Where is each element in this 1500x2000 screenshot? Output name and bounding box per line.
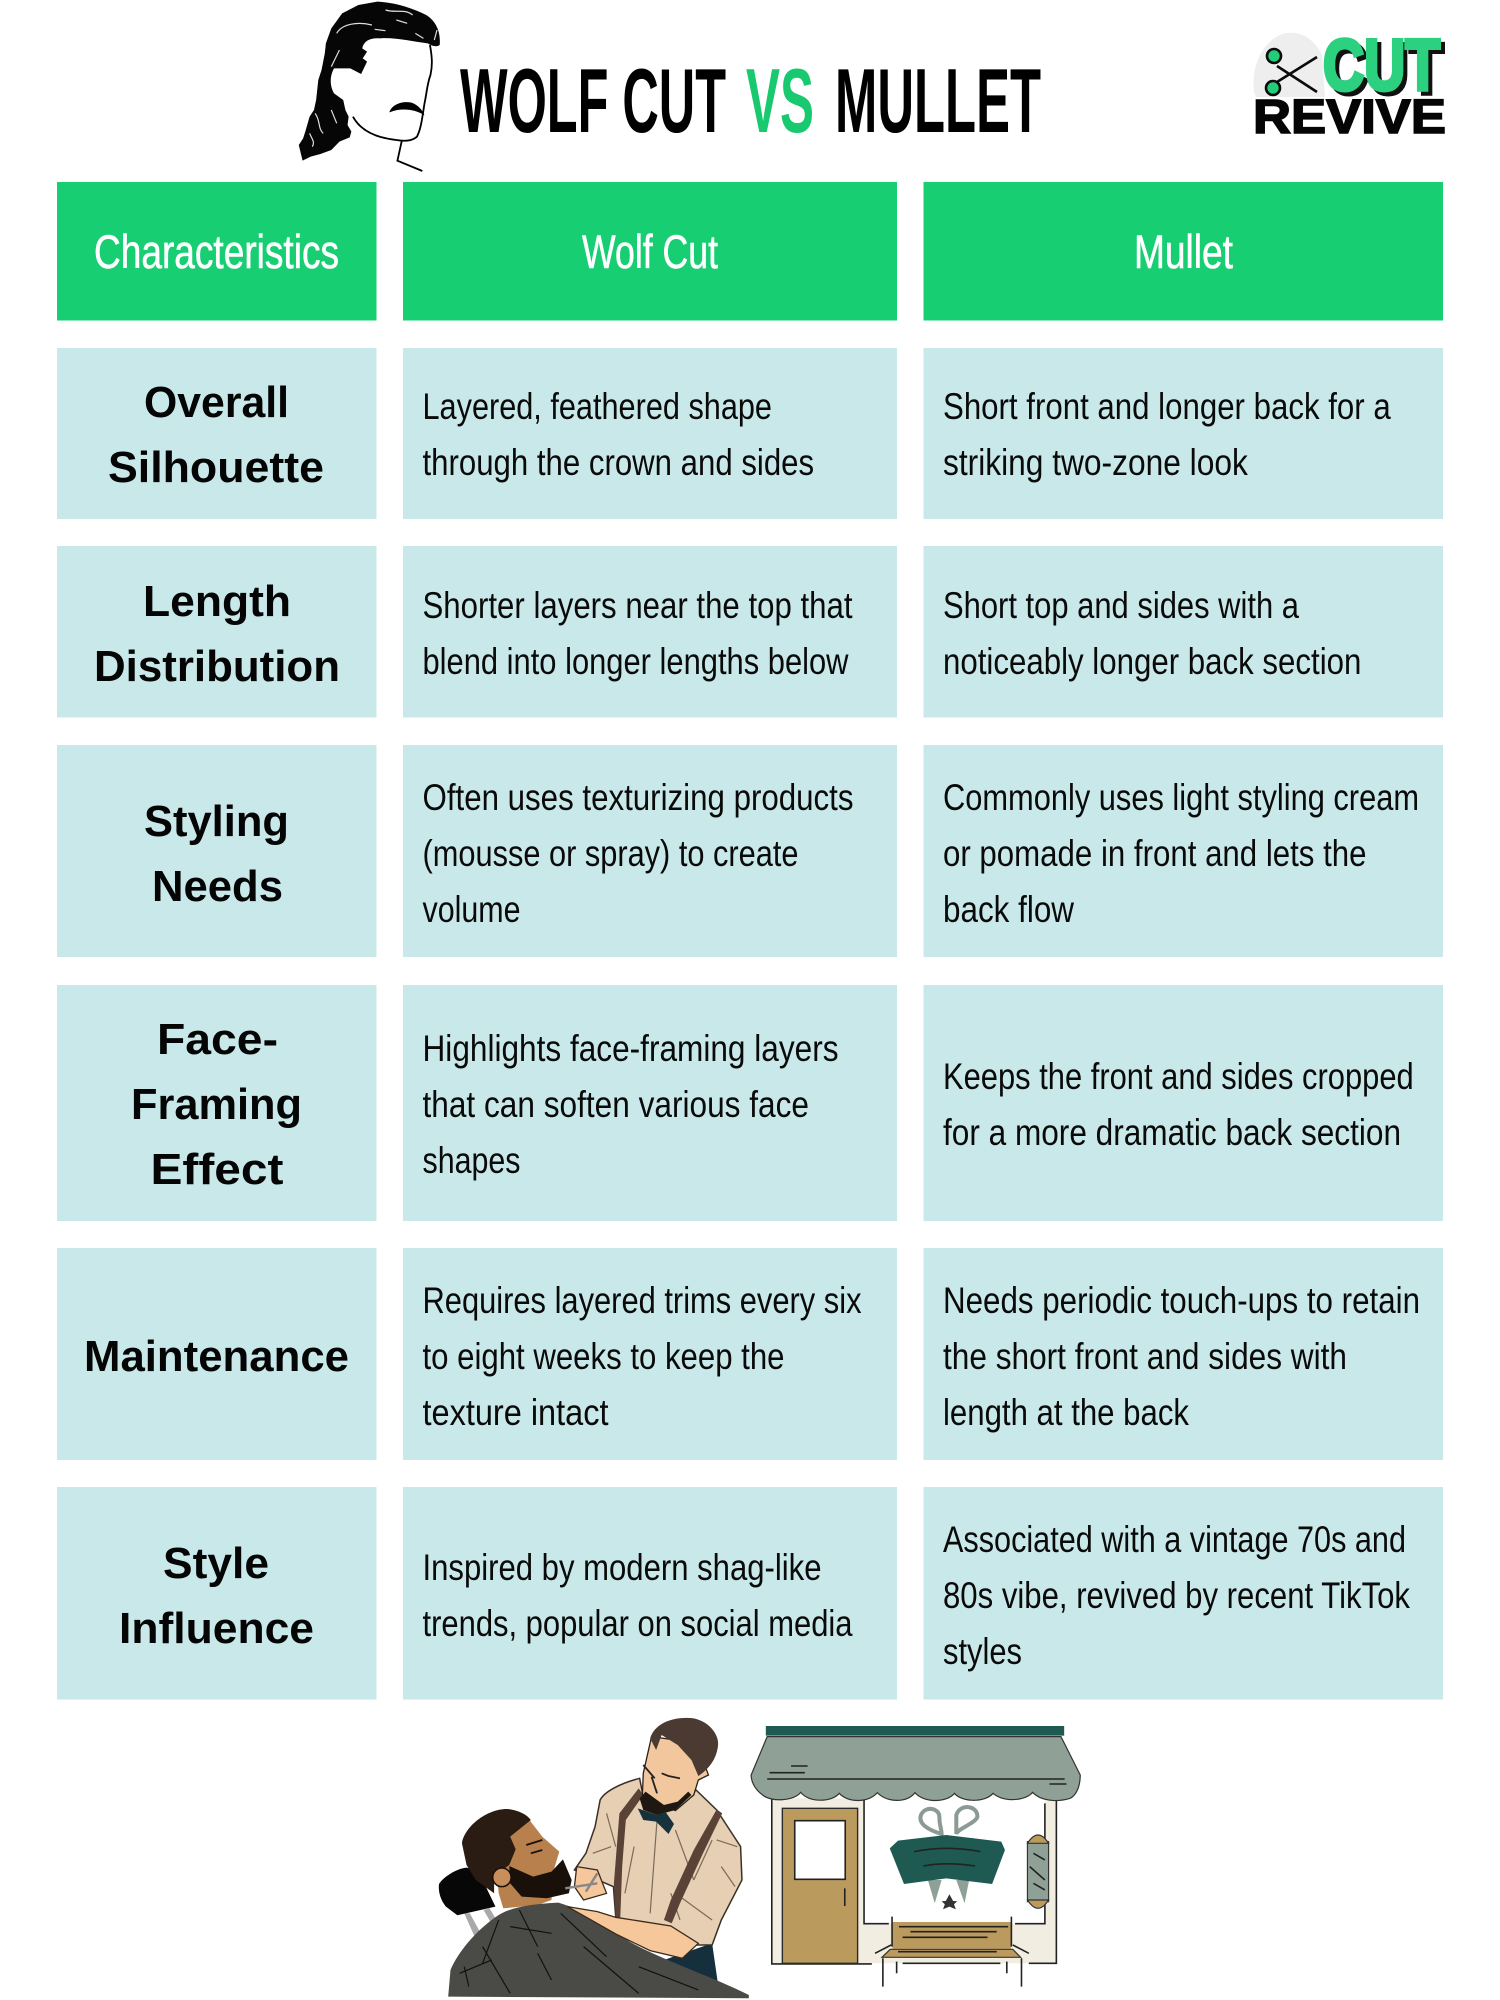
wolf cut: maintenance: Requires layered trims every six <box>422 1280 862 1321</box>
mullet: silhouette: striking two-zone look <box>943 442 1248 483</box>
row label: Maintenance <box>57 1248 376 1460</box>
mullet: maintenance: Needs periodic touch-ups to retain <box>943 1280 1420 1321</box>
icon: scissors <box>1266 49 1317 95</box>
logo: Cut Revive <box>1253 26 1446 144</box>
client head <box>462 1809 572 1908</box>
header: Characteristics <box>57 182 376 320</box>
mullet: face framing <box>924 985 1443 1221</box>
mullet: styling: back flow <box>943 889 1074 930</box>
wolf cut: style influence: Inspired by modern shag-like <box>422 1547 822 1588</box>
barber pole <box>1027 1835 1049 1908</box>
row label: Overall Silhouette <box>57 348 376 519</box>
mullet: length <box>924 546 1443 718</box>
wolf cut: face framing: shapes <box>422 1140 520 1181</box>
mullet: style influence: styles <box>943 1631 1022 1672</box>
barber trousers <box>664 1943 718 1982</box>
mullet: styling: or pomade in front and lets the <box>943 833 1366 874</box>
wolf cut: styling <box>403 745 897 957</box>
row label: Style Influence <box>57 1487 376 1700</box>
barber shirt <box>574 1778 742 1945</box>
wolf cut: style influence <box>403 1487 897 1700</box>
illustration: barber shop <box>751 1726 1080 1987</box>
row label: Face-Framing Effect: Effect <box>150 1145 284 1194</box>
wolf cut: face framing <box>403 985 897 1221</box>
awning <box>751 1726 1080 1801</box>
mullet: maintenance: length at the back <box>943 1392 1189 1433</box>
icon: moustache <box>389 102 425 115</box>
wolf cut: maintenance <box>403 1248 897 1460</box>
header: Wolf Cut <box>403 182 897 320</box>
suspenders <box>614 1788 722 1923</box>
mullet: silhouette <box>924 348 1443 519</box>
shop sign with scissors and star <box>890 1807 1005 1909</box>
wolf cut: style influence: trends, popular on social media <box>422 1603 853 1644</box>
door <box>782 1808 858 1963</box>
wolf cut: maintenance: texture intact <box>422 1392 609 1433</box>
wolf cut: styling: (mousse or spray) to create <box>422 833 798 874</box>
shop wall <box>772 1798 1056 1963</box>
wolf cut: maintenance: to eight weeks to keep the <box>422 1336 784 1377</box>
logo: Cut Revive: CUT <box>1323 26 1440 106</box>
wolf cut: silhouette: through the crown and sides <box>422 442 814 483</box>
mullet: styling <box>924 745 1443 957</box>
shop window <box>864 1798 1045 1924</box>
scissors <box>565 1873 597 1892</box>
icon: mullet head <box>299 2 440 171</box>
mullet: face framing: for a more dramatic back section <box>943 1112 1401 1153</box>
row label: Face-Framing Effect <box>57 985 376 1221</box>
header: Characteristics: Characteristics <box>94 225 339 278</box>
row label: Styling Needs <box>57 745 376 957</box>
mullet: style influence <box>924 1487 1443 1700</box>
barber beard <box>640 1792 691 1815</box>
wolf cut: face framing: that can soften various face <box>422 1084 809 1125</box>
header: Mullet <box>924 182 1443 320</box>
wolf cut: length: Shorter layers near the top that <box>422 585 853 626</box>
row label: Face-Framing Effect: Face- <box>157 1015 278 1064</box>
row label: Length Distribution <box>57 546 376 718</box>
wolf cut: length <box>403 546 897 718</box>
bow tie <box>638 1808 674 1834</box>
header: Mullet: Mullet <box>1134 225 1233 278</box>
title: VS <box>746 51 814 152</box>
wolf cut: face framing: Highlights face-framing layers <box>422 1028 838 1069</box>
illustration: barber trimming client's beard <box>439 1718 749 1998</box>
bench <box>875 1917 1029 1987</box>
title: WOLF CUT <box>460 51 726 152</box>
row label: Style Influence: Influence <box>119 1604 314 1653</box>
mullet: length: Short top and sides with a <box>943 585 1299 626</box>
wolf cut: silhouette <box>403 348 897 519</box>
header: Wolf Cut: Wolf Cut <box>582 225 718 278</box>
wolf cut: styling: Often uses texturizing products <box>422 777 854 818</box>
title: MULLET <box>835 51 1041 152</box>
mullet: styling: Commonly uses light styling cream <box>943 777 1419 818</box>
cape <box>448 1903 749 1998</box>
wolf cut: styling: volume <box>422 889 520 930</box>
row label: Face-Framing Effect: Framing <box>131 1080 302 1129</box>
mullet: style influence: 80s vibe, revived by recent TikTok <box>943 1575 1410 1616</box>
mullet: silhouette: Short front and longer back for a <box>943 386 1391 427</box>
row label: Overall Silhouette: Silhouette <box>108 443 324 492</box>
wolf cut: length: blend into longer lengths below <box>422 641 849 682</box>
mullet: length: noticeably longer back section <box>943 641 1361 682</box>
row label: Length Distribution: Length <box>143 577 291 626</box>
barber forearm and hands <box>568 1867 698 1958</box>
row label: Overall Silhouette: Overall <box>144 378 289 427</box>
logo: Cut Revive: REVIVE <box>1253 91 1446 144</box>
row label: Length Distribution: Distribution <box>94 642 340 691</box>
barber skin and face <box>642 1737 708 1811</box>
mullet: maintenance: the short front and sides with <box>943 1336 1347 1377</box>
row label: Styling Needs: Styling <box>144 797 289 846</box>
row label: Styling Needs: Needs <box>152 862 283 911</box>
row label: Maintenance: Maintenance <box>84 1332 349 1381</box>
wolf cut: silhouette: Layered, feathered shape <box>422 386 772 427</box>
chair <box>439 1868 495 1939</box>
mullet: maintenance <box>924 1248 1443 1460</box>
row label: Style Influence: Style <box>163 1539 269 1588</box>
mullet: face framing: Keeps the front and sides cropped <box>943 1056 1414 1097</box>
barber hair <box>650 1718 718 1776</box>
mullet: style influence: Associated with a vintage 70s and <box>943 1519 1406 1560</box>
